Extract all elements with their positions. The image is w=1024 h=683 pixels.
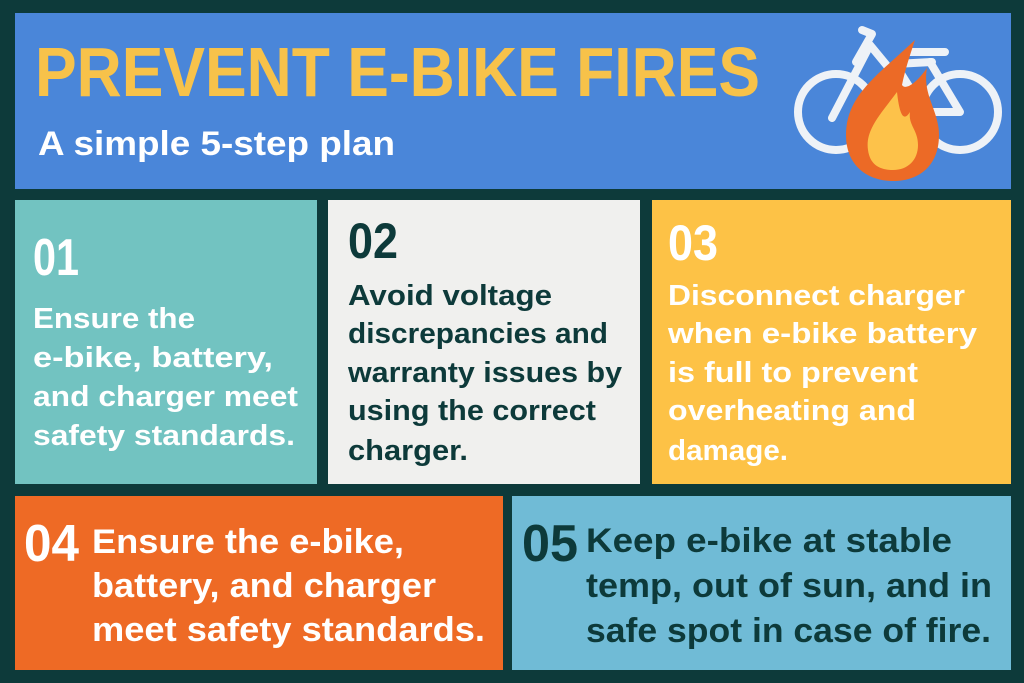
subtitle: A simple 5-step plan <box>38 125 395 163</box>
panel: step 03 <box>652 200 1011 484</box>
panel: step 02: 02 <box>348 213 398 269</box>
panel: step 01: e-bike, battery, <box>33 342 273 374</box>
panel: step 02: using the correct <box>348 395 596 427</box>
panel: step 03: overheating and <box>668 395 916 427</box>
panel: step 03: 03 <box>668 215 718 271</box>
panel: step 01 <box>15 200 317 484</box>
panel: step 05 <box>512 496 1011 670</box>
panel: step 04 <box>15 496 503 670</box>
panel: step 01: Ensure the <box>33 303 195 335</box>
panel: step 02: warranty issues by <box>347 357 622 389</box>
panel: step 04: Ensure the e-bike, <box>92 523 404 561</box>
icon: bicycle with flame <box>798 30 998 181</box>
panel: step 05: 05 <box>522 515 578 573</box>
panel: step 03: damage. <box>668 435 788 467</box>
panel: step 04: 04 <box>24 515 79 573</box>
panel: step 01: 01 <box>33 229 79 287</box>
panel: step 05: safe spot in case of fire. <box>586 612 991 650</box>
panel: step 05: Keep e-bike at stable <box>586 522 952 560</box>
title: PREVENT E-BIKE FIRES <box>35 33 760 111</box>
panel: step 02: Avoid voltage <box>348 280 552 312</box>
panel: step 01: safety standards. <box>33 420 295 452</box>
panel: step 05: temp, out of sun, and in <box>586 567 992 605</box>
panel: step 02: charger. <box>348 435 468 467</box>
panel: step 03: is full to prevent <box>668 357 918 389</box>
panel: step 01: and charger meet <box>33 381 298 413</box>
panel: step 02: discrepancies and <box>348 318 608 350</box>
panel: step 03: Disconnect charger <box>668 280 965 312</box>
panel: step 02 <box>328 200 640 484</box>
panel: step 04: meet safety standards. <box>92 611 485 649</box>
panel: step 03: when e-bike battery <box>667 318 977 350</box>
header panel <box>15 13 1011 189</box>
panel: step 04: battery, and charger <box>92 567 436 605</box>
